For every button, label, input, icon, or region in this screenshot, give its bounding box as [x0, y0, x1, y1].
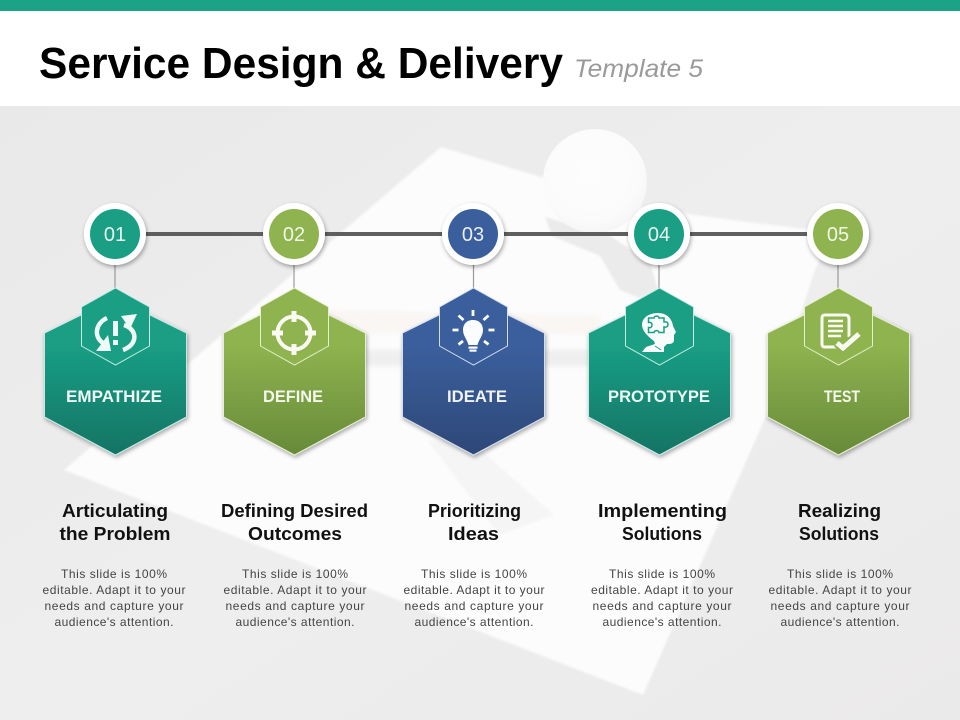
body text 02	[224, 567, 366, 629]
body text 03: This slide is 100%	[421, 567, 527, 581]
number badge 01: 01	[104, 224, 126, 246]
body text 04: needs and capture your	[592, 599, 732, 613]
hexagon 01	[44, 288, 186, 455]
step 04: prototype	[588, 203, 733, 629]
heading 04: Implementing	[598, 501, 727, 521]
label EMPATHIZE: EMPATHIZE	[66, 387, 162, 406]
body text 04: This slide is 100%	[609, 567, 715, 581]
heading 01	[60, 501, 170, 544]
subtitle: Template 5	[574, 55, 703, 83]
step 02: define	[221, 203, 368, 629]
hexagon 04	[588, 288, 730, 455]
number badge 05: 05	[827, 224, 849, 246]
body text 03	[404, 567, 544, 629]
icon: head with puzzle piece	[642, 313, 676, 352]
icon: document with check mark	[822, 315, 859, 348]
step 01: empathize	[42, 203, 186, 629]
body text 04: audience's attention.	[602, 615, 722, 629]
label PROTOTYPE: PROTOTYPE	[608, 387, 710, 406]
heading 05	[798, 501, 881, 544]
step 03: ideate	[402, 203, 544, 629]
body text 02: editable. Adapt it to your	[224, 583, 366, 597]
label DEFINE: DEFINE	[263, 387, 323, 406]
heading 03: Ideas	[448, 524, 499, 544]
body text 04	[591, 567, 733, 629]
heading 03	[428, 501, 521, 544]
body text 01: needs and capture your	[44, 599, 184, 613]
hexagon 02	[224, 288, 366, 455]
heading 05: Solutions	[799, 524, 879, 544]
number badge 05	[807, 203, 869, 265]
body text 01: This slide is 100%	[61, 567, 167, 581]
heading 05: Realizing	[798, 501, 881, 521]
heading 03: Prioritizing	[428, 501, 521, 521]
hexagon 03	[402, 288, 544, 455]
icon: light bulb	[452, 310, 494, 352]
heading 02: Defining Desired	[221, 501, 368, 521]
number badge 02: 02	[283, 224, 305, 246]
number badge 02	[263, 203, 325, 265]
number badge 03: 03	[462, 224, 484, 246]
body text 03: needs and capture your	[404, 599, 544, 613]
body text 03: editable. Adapt it to your	[404, 583, 544, 597]
title: Service Design & Delivery	[39, 39, 564, 88]
body text 05: audience's attention.	[780, 615, 900, 629]
heading 02: Outcomes	[248, 524, 342, 544]
label IDEATE: IDEATE	[447, 387, 507, 406]
body text 02: This slide is 100%	[242, 567, 348, 581]
body text 04: editable. Adapt it to your	[591, 583, 733, 597]
body text 05	[768, 567, 912, 629]
body text 03: audience's attention.	[414, 615, 534, 629]
heading 02	[221, 501, 368, 544]
number badge 01	[84, 203, 146, 265]
top accent bar	[0, 0, 960, 11]
heading 04	[598, 501, 727, 544]
timeline line	[115, 232, 838, 236]
number badge 04	[628, 203, 690, 265]
number badge 03	[442, 203, 504, 265]
body text 05: This slide is 100%	[787, 567, 893, 581]
heading 01: the Problem	[60, 524, 170, 544]
body text 02: audience's attention.	[236, 615, 354, 629]
icon: target crosshair	[272, 311, 316, 355]
body text 01: editable. Adapt it to your	[42, 583, 186, 597]
body text 02: needs and capture your	[226, 599, 364, 613]
step 05: test	[768, 203, 912, 629]
body text 01: audience's attention.	[54, 615, 174, 629]
label TEST: TEST	[824, 387, 861, 406]
body text 05: editable. Adapt it to your	[768, 583, 912, 597]
number badge 04: 04	[648, 224, 670, 246]
heading 01: Articulating	[62, 501, 168, 521]
header band	[0, 0, 960, 106]
hexagon 05	[768, 288, 910, 455]
body text 05: needs and capture your	[770, 599, 910, 613]
heading 04: Solutions	[622, 524, 702, 544]
icon: cycle arrows with exclamation mark	[96, 314, 137, 351]
body text 01	[42, 567, 186, 629]
